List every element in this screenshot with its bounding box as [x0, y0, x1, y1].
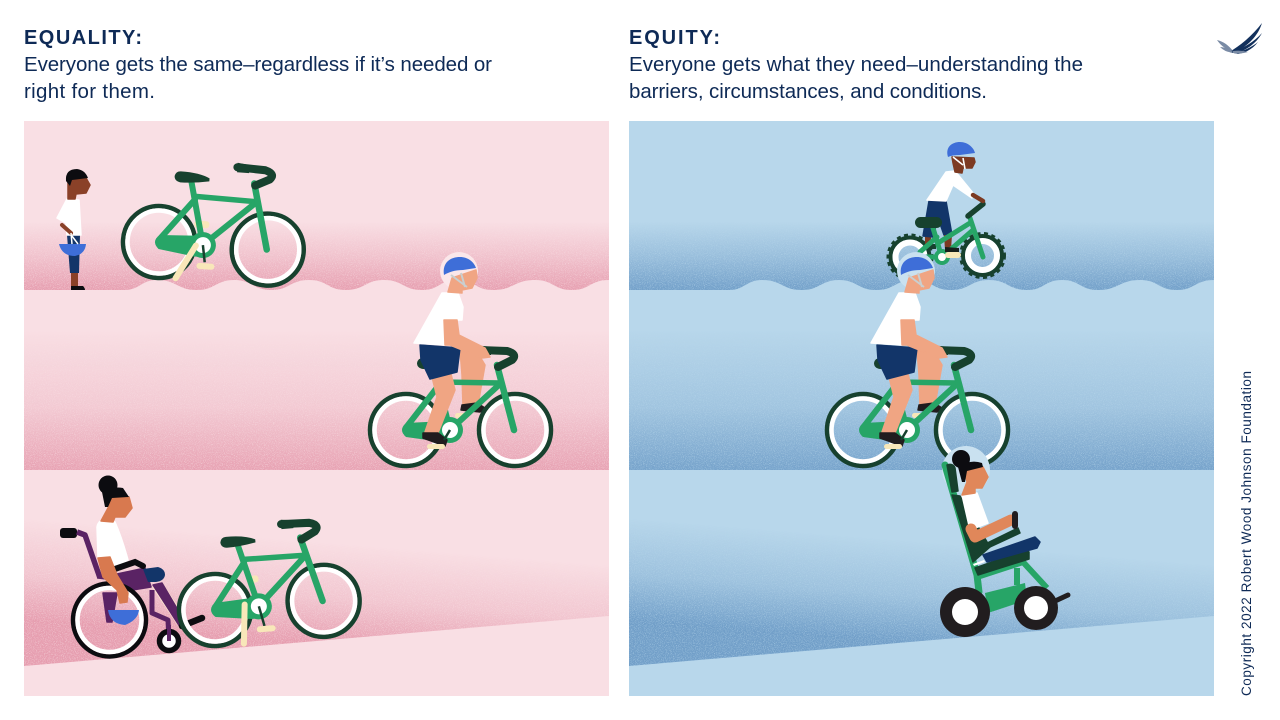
- panel: equality: [24, 121, 609, 696]
- figure: wheelchair user: [60, 476, 202, 656]
- figure: child on small knobby-tyre bike: [888, 142, 1004, 279]
- icon: foundation logo: [1217, 23, 1262, 54]
- figure: power wheelchair user: [940, 446, 1068, 637]
- panel: equity: [629, 121, 1214, 696]
- bicycle: unused bike on the flat: [121, 155, 310, 288]
- heading: equity: EQUITY:: [629, 27, 720, 49]
- halo behind rider head: [440, 252, 478, 290]
- heading: equality: EQUALITY:: [24, 27, 142, 49]
- text block: equality definition second line: right for them.: [24, 80, 155, 103]
- halo behind rider head: [897, 252, 935, 290]
- figure: rider on adult bike: [370, 252, 551, 466]
- text block: copyright note: Copyright 2022 Robert Wood Johnson Foundation: [1239, 371, 1254, 696]
- bicycle: unused bike on the slope: [172, 514, 363, 649]
- text block: equity definition second line: barriers, circumstances, and conditions.: [629, 80, 987, 103]
- text block: equity definition: Everyone gets what they need–understanding the: [629, 53, 1083, 76]
- figure: rider on adult bike: [827, 252, 1008, 466]
- figure: standing child with helmet: [57, 169, 90, 290]
- text block: equality definition: Everyone gets the same–regardless if it’s needed or: [24, 53, 492, 76]
